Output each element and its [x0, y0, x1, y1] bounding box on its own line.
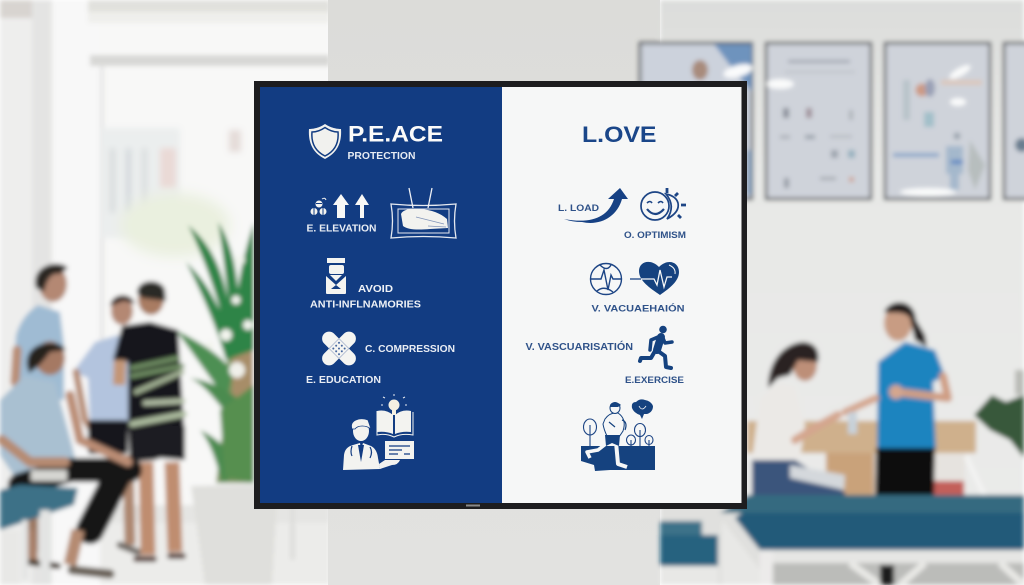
- icon: vascular globe: [590, 264, 622, 294]
- bench: [0, 485, 78, 530]
- text: elevation: E. ELEVATION: [306, 222, 376, 234]
- text: vascularisation: V. VASCUARISATIÓN: [526, 340, 633, 353]
- text: exercise: E.EXERCISE: [625, 375, 684, 386]
- posters: [640, 43, 752, 199]
- man in black shirt: [146, 462, 175, 555]
- woman standing: [73, 335, 128, 425]
- seated woman in white: [752, 383, 805, 460]
- icon: thin up arrow: [355, 194, 369, 218]
- icon: running figure: [640, 326, 672, 368]
- pot: [191, 484, 278, 585]
- icon: rising curved arrow: [564, 188, 628, 223]
- text: load: L. LOAD: [558, 203, 599, 214]
- background: central wall column: [328, 0, 660, 585]
- man standing left: [22, 480, 38, 550]
- icon: limb on pillow: [391, 188, 456, 238]
- icon: thick up arrow: [333, 194, 349, 218]
- tan cabinet: [747, 421, 976, 453]
- panel: L.OVE white: [502, 87, 742, 503]
- background: clinic right side with posters, staff and treatment beds: [640, 0, 1024, 585]
- background: clinic left side with window and waiting patients: [0, 0, 330, 585]
- icon: runner in park with thought cloud: [581, 399, 655, 471]
- text: optimism: O. OPTIMISM: [624, 230, 686, 241]
- screen: display frame: [254, 81, 747, 509]
- icon: hourglass medicine bottle: [326, 258, 346, 294]
- icon: doctor with book and chart: [343, 394, 414, 470]
- text: protection: PROTECTION: [348, 151, 416, 162]
- text: compression: C. COMPRESSION: [365, 343, 455, 355]
- heading: L.OVE: L.OVE: [582, 122, 656, 147]
- text: avoid: AVOID: [358, 283, 393, 295]
- benches: [720, 495, 1024, 513]
- plant: [216, 345, 253, 483]
- text: anti-inflammatories: ANTI-INFLNAMORIES: [310, 298, 421, 310]
- standing woman in blue: [877, 342, 945, 450]
- text: education: E. EDUCATION: [306, 374, 381, 386]
- icon: crossed bandage: [319, 329, 359, 368]
- heading: P.E.ACE: P.E.ACE: [348, 122, 443, 146]
- icon: molecules: [310, 198, 326, 215]
- seated woman: [0, 376, 76, 482]
- panel: P.E.ACE blue: [260, 87, 502, 503]
- icon: shield: [309, 124, 341, 159]
- text: vacuaehaion: V. VACUAEHAIÓN: [592, 302, 685, 314]
- icon: heart with pulse: [630, 262, 679, 295]
- icon: smiling face with sun: [641, 188, 686, 220]
- plant right: [974, 395, 1024, 458]
